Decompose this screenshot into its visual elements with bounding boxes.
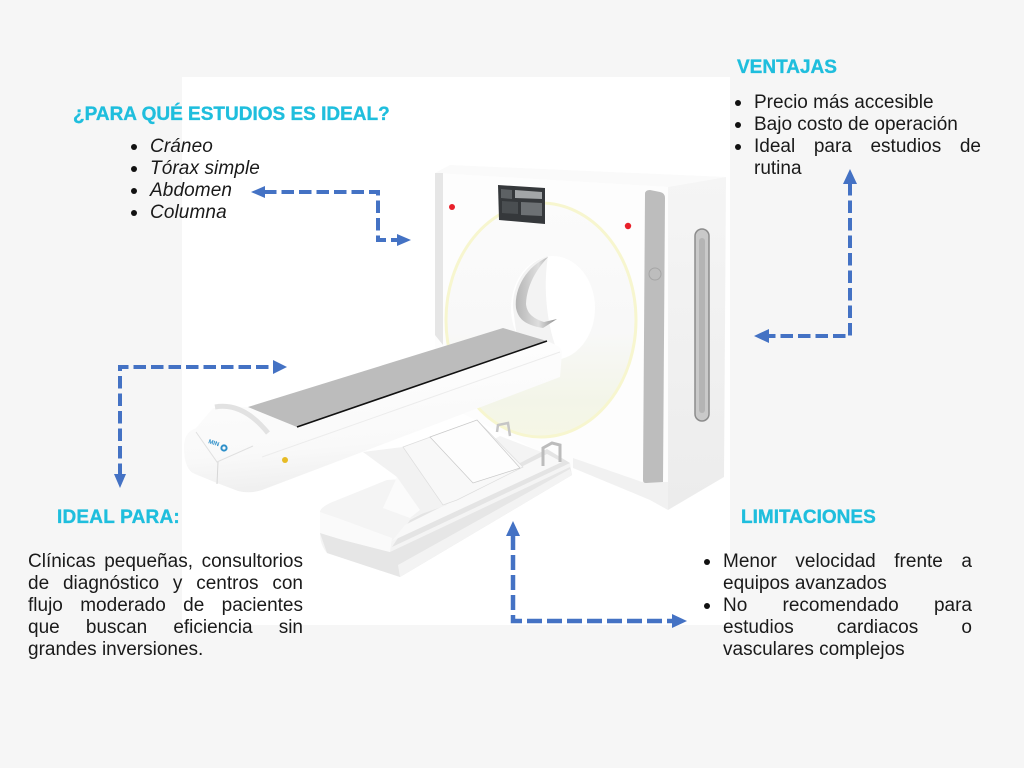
list: ideal studies: Columna: [150, 202, 227, 223]
patient table: MIN: [207, 439, 220, 448]
list: limitations: Menor velocidad frente a: [723, 551, 972, 572]
heading: limitations: LIMITACIONES: [741, 507, 876, 528]
text: ideal for: Clínicas pequeñas, consultorios: [28, 551, 303, 572]
list: advantages: [735, 92, 981, 179]
list: advantages: Ideal para estudios de: [754, 136, 981, 157]
white photo panel: [182, 77, 730, 625]
list: limitations: No recomendado para: [723, 595, 972, 616]
heading: ideal for: IDEAL PARA:: [57, 507, 180, 528]
list: ideal studies: Abdomen: [150, 180, 232, 201]
list: advantages: Precio más accesible: [754, 92, 934, 113]
heading: advantages: VENTAJAS: [737, 57, 837, 78]
text: ideal for: de diagnóstico y centros con: [28, 573, 303, 594]
list: ideal studies: Cráneo: [150, 136, 213, 157]
list: ideal studies: [131, 136, 260, 223]
gantry: [435, 165, 726, 510]
heading: ideal studies: ¿PARA QUÉ ESTUDIOS ES IDEAL?: [73, 104, 390, 125]
list: limitations: estudios cardiacos o: [723, 617, 972, 638]
text: ideal for: flujo moderado de pacientes: [28, 595, 303, 616]
text: ideal for: [28, 551, 303, 660]
list: advantages: rutina: [754, 158, 802, 179]
lower base platform: [320, 420, 572, 577]
list: ideal studies: Tórax simple: [150, 158, 260, 179]
list: limitations: vasculares complejos: [723, 639, 905, 660]
list: limitations: [704, 551, 972, 660]
list: advantages: Bajo costo de operación: [754, 114, 958, 135]
patient table: [184, 328, 562, 492]
list: limitations: equipos avanzados: [723, 573, 887, 594]
text: ideal for: que buscan eficiencia sin: [28, 617, 303, 638]
text: ideal for: grandes inversiones.: [28, 639, 203, 660]
